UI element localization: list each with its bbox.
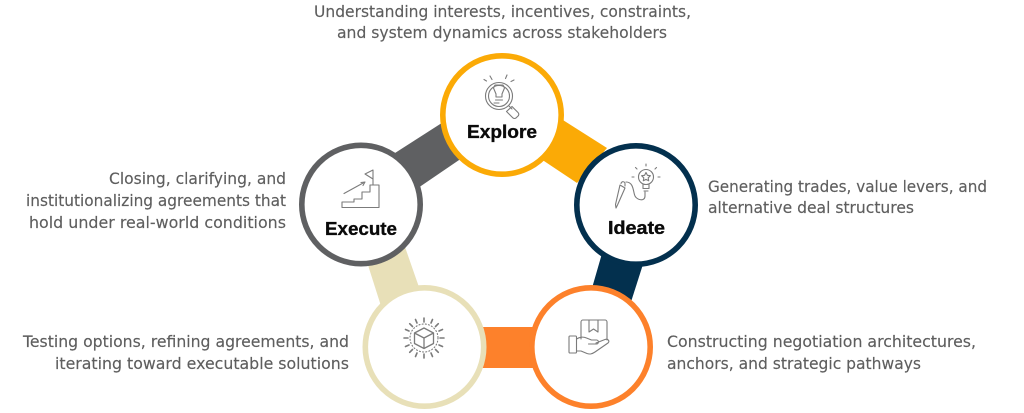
text: execute description: institutionalizing agreements that xyxy=(26,191,286,210)
connector: execute to explore xyxy=(395,119,462,188)
text: construct description xyxy=(667,332,976,373)
text: execute description: Closing, clarifying, and xyxy=(109,169,286,188)
text: execute description: hold under real-world conditions xyxy=(29,213,286,232)
icon: pencil and lightbulb xyxy=(616,164,660,208)
text: ideate description: Generating trades, value levers, and xyxy=(708,177,987,196)
heading: Execute: Execute xyxy=(325,218,397,239)
connector: construct to test xyxy=(475,327,540,368)
heading: Explore: Explore xyxy=(467,121,537,142)
panel: construct node xyxy=(532,288,650,406)
text: execute description xyxy=(26,169,286,232)
heading: Ideate: Ideate xyxy=(608,217,665,238)
circle: explore xyxy=(443,56,561,174)
icon: hand holding box xyxy=(569,320,609,354)
text: test description: Testing options, refining agreements, and xyxy=(22,332,349,351)
text: test description xyxy=(22,332,349,373)
panel: ideate node xyxy=(577,146,695,264)
circle: ideate xyxy=(577,146,695,264)
circle: execute xyxy=(302,145,420,264)
icon: cube with arrows xyxy=(404,318,444,358)
text: explore description: Understanding interests, incentives, constraints, xyxy=(314,2,691,21)
panel: test node xyxy=(365,288,484,406)
text: explore description: and system dynamics across stakeholders xyxy=(337,23,667,42)
panel: execute node xyxy=(302,145,420,264)
text: test description: iterating toward executable solutions xyxy=(55,354,349,373)
panel: explore node xyxy=(443,56,561,174)
text: ideate description xyxy=(708,177,987,217)
connector: test to execute xyxy=(367,247,420,306)
text: explore description xyxy=(314,2,691,42)
circle: construct xyxy=(532,288,650,406)
connector: explore to ideate xyxy=(535,115,607,183)
text: construct description: Constructing negotiation architectures, xyxy=(667,332,976,351)
circle: test xyxy=(365,288,484,406)
icon: lightbulb magnifier xyxy=(484,75,519,118)
icon: stairs with flag xyxy=(342,170,379,208)
text: construct description: anchors, and strategic pathways xyxy=(667,354,921,373)
connector: ideate to construct xyxy=(590,250,645,305)
text: ideate description: alternative deal structures xyxy=(708,198,914,217)
